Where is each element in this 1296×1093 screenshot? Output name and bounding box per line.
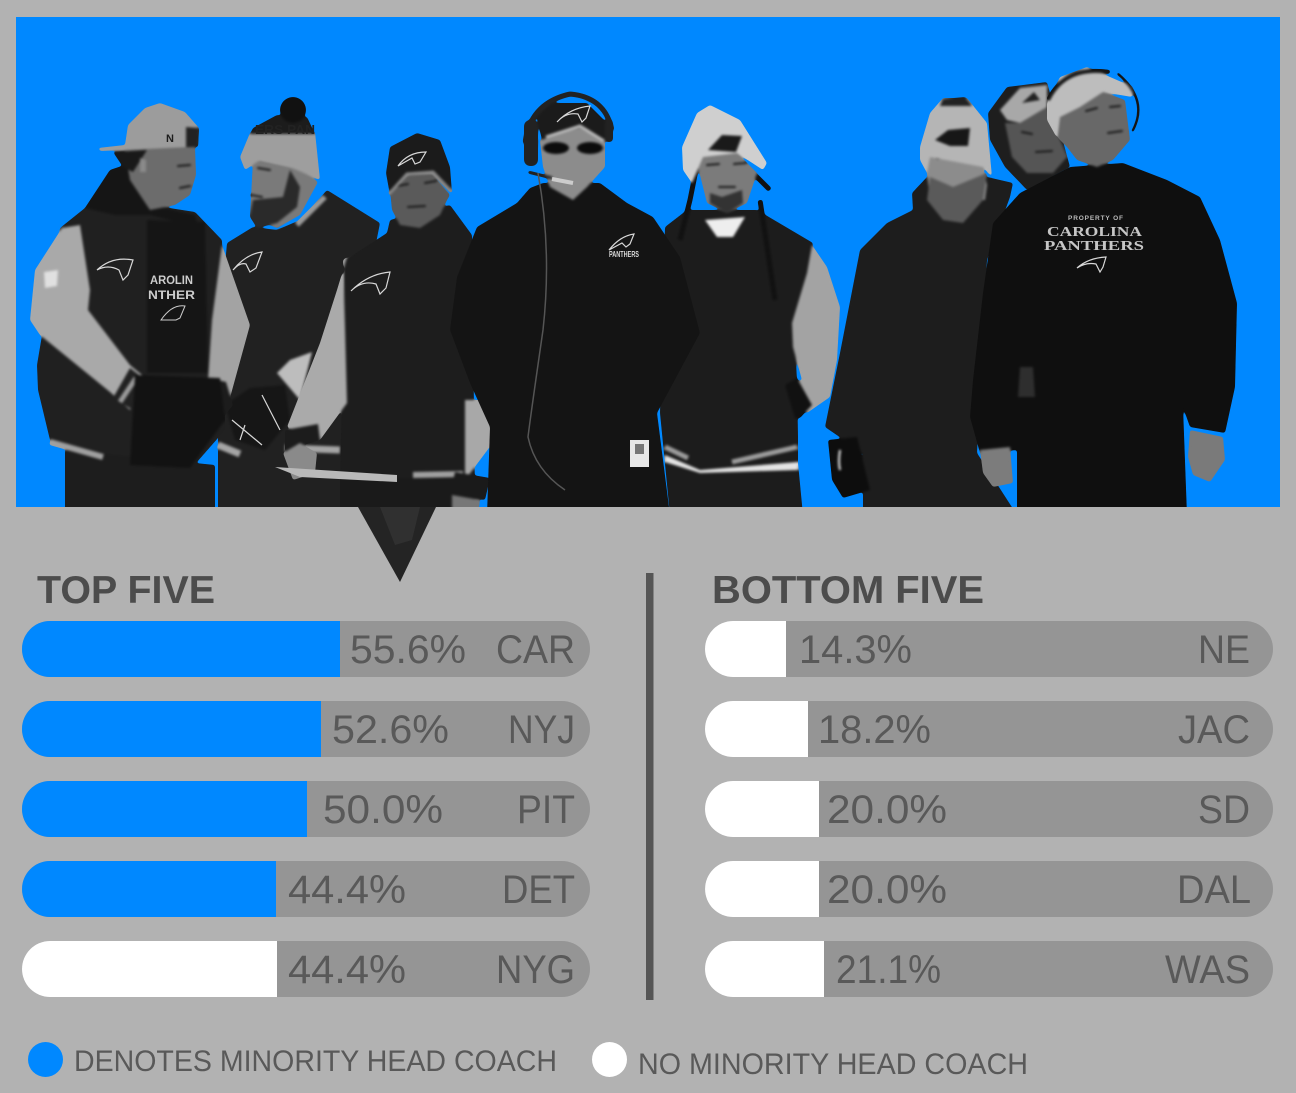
bar: SD 20.0% xyxy=(705,781,1273,837)
bar: NE 14.3% xyxy=(705,621,1273,677)
legend: minority head coach: DENOTES MINORITY HEAD COACH xyxy=(74,1045,557,1078)
bar: JAC 18.2%: JAC xyxy=(1178,708,1250,752)
person: coach looking up in Carolina Panthers sweatshirt: CAROLINA xyxy=(1047,225,1143,240)
person: head coach in cap and headset xyxy=(450,94,700,515)
bar: PIT 50.0%: 50.0% xyxy=(323,788,443,832)
person: man in NFL cap and varsity jacket: AROLIN xyxy=(150,273,193,287)
person: hooded man behind xyxy=(988,82,1070,190)
person: bearded man in beanie: ERS PAN xyxy=(255,122,315,137)
person: head coach in cap and headset: PANTHERS xyxy=(609,250,639,259)
person: man in light beanie with long hair xyxy=(660,105,840,515)
bar: DAL 20.0% xyxy=(705,861,1273,917)
hero photo panel: coaching staff on blue xyxy=(0,17,1296,527)
bar: WAS 21.1%: WAS xyxy=(1165,948,1250,992)
bar: NYG 44.4%: 44.4% xyxy=(288,948,406,992)
bar: WAS 21.1%: 21.1% xyxy=(836,948,941,992)
callout pointer triangle xyxy=(358,507,436,582)
bar: CAR 55.6%: 55.6% xyxy=(350,628,466,672)
heading: top five: TOP FIVE xyxy=(37,569,215,612)
page-colored strip clipping figures at the hero bottom xyxy=(0,507,1296,527)
bar: NYG 44.4% xyxy=(22,941,590,997)
bar: DET 44.4%: 44.4% xyxy=(288,868,406,912)
bar: PIT 50.0%: PIT xyxy=(517,788,575,832)
bar: CAR 55.6% xyxy=(22,621,590,677)
person: man in dark beanie with clipboard xyxy=(275,133,495,515)
heading: bottom five: BOTTOM FIVE xyxy=(712,569,984,612)
bar: JAC 18.2% xyxy=(705,701,1273,757)
person: man in NFL cap and varsity jacket: N xyxy=(166,133,174,145)
bar: DAL 20.0%: 20.0% xyxy=(827,868,947,912)
bar: PIT 50.0% xyxy=(22,781,590,837)
bar: NE 14.3%: NE xyxy=(1198,628,1250,672)
bar: WAS 21.1% xyxy=(705,941,1273,997)
bar: NE 14.3%: 14.3% xyxy=(799,628,912,672)
person: man in NFL cap and varsity jacket xyxy=(30,103,250,515)
bar: SD 20.0%: 20.0% xyxy=(827,788,947,832)
bar chart: bottom five xyxy=(705,621,1273,997)
bar: JAC 18.2%: 18.2% xyxy=(818,708,931,752)
bar: NYG 44.4%: NYG xyxy=(496,948,575,992)
bar: NYJ 52.6%: 52.6% xyxy=(332,708,449,752)
person: bearded man in beanie xyxy=(218,97,380,515)
legend: no minority head coach: NO MINORITY HEAD COACH xyxy=(638,1048,1028,1081)
bar: DET 44.4%: DET xyxy=(502,868,575,912)
bar: SD 20.0%: SD xyxy=(1198,788,1250,832)
bar: DET 44.4% xyxy=(22,861,590,917)
person: man in NFL cap and varsity jacket: NTHER xyxy=(148,288,195,302)
bar: NYJ 52.6%: NYJ xyxy=(508,708,575,752)
person: coach looking up in Carolina Panthers sweatshirt: PANTHERS xyxy=(1044,239,1144,254)
person: bearded man in team beanie xyxy=(825,97,1017,515)
bar: DAL 20.0%: DAL xyxy=(1177,868,1251,912)
center divider xyxy=(646,573,654,1000)
bar chart: top five xyxy=(22,621,590,997)
person: coach looking up in Carolina Panthers sweatshirt: PROPERTY OF xyxy=(1068,215,1123,222)
bar: NYJ 52.6% xyxy=(22,701,590,757)
bar: CAR 55.6%: CAR xyxy=(496,628,575,672)
person: coach looking up in Carolina Panthers sweatshirt xyxy=(970,67,1237,515)
